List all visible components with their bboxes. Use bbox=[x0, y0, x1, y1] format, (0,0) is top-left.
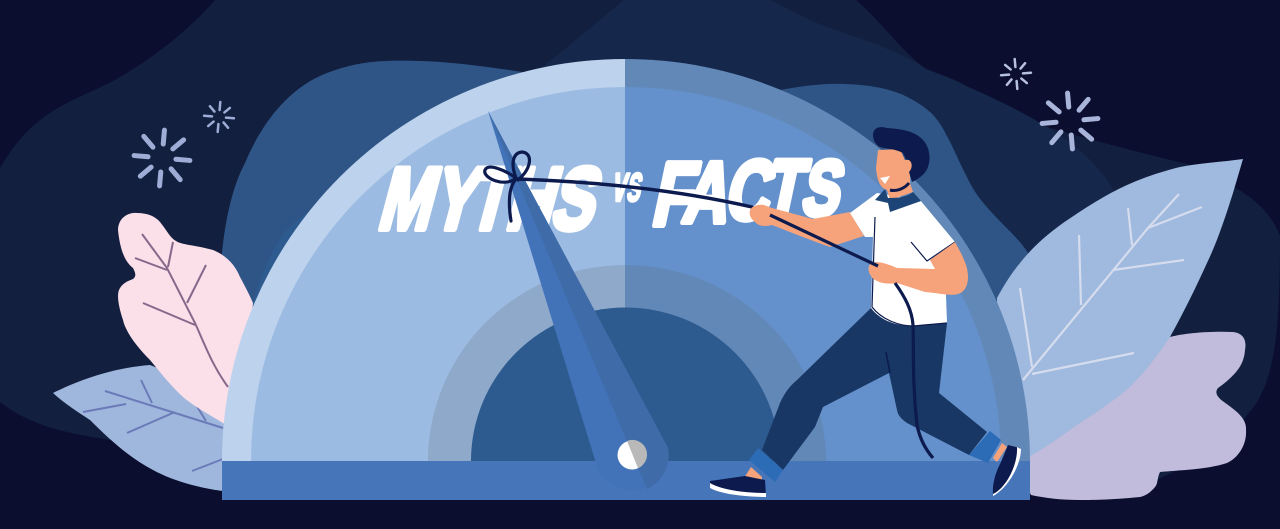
smile bbox=[880, 176, 890, 184]
pants bbox=[762, 308, 987, 470]
gauge base bbox=[222, 461, 1030, 500]
leaf: right blue bbox=[997, 159, 1243, 470]
left ankle bbox=[744, 467, 762, 481]
shirt bbox=[850, 193, 955, 326]
shirt lines bbox=[872, 217, 955, 326]
right shoe sole bbox=[993, 447, 1021, 496]
collar bbox=[875, 189, 921, 212]
left cuff bbox=[749, 448, 783, 482]
left shoe bbox=[710, 476, 766, 497]
title: myths: Y bbox=[424, 149, 493, 248]
rope in hands bbox=[770, 215, 933, 458]
title: myths: H bbox=[499, 149, 571, 248]
right ankle bbox=[993, 443, 1007, 462]
title: facts: C bbox=[719, 143, 783, 237]
rope with bow bbox=[485, 152, 752, 221]
gauge dial bbox=[222, 59, 1030, 461]
near arm and hand bbox=[868, 242, 968, 295]
leaf: left blue bbox=[53, 365, 240, 493]
gauge needle bbox=[488, 111, 669, 490]
title: myths: M bbox=[371, 149, 450, 248]
left shoe sole bbox=[710, 483, 766, 497]
title: vs: vs bbox=[609, 154, 648, 212]
sparkle: right large bbox=[1040, 91, 1100, 151]
sparkle: left large bbox=[132, 128, 192, 188]
leaf: left pink bbox=[118, 213, 253, 440]
trouser seam bbox=[886, 352, 890, 373]
title: myths: S bbox=[544, 149, 612, 248]
head and neck bbox=[876, 149, 913, 200]
title: facts: A bbox=[677, 145, 742, 241]
title: facts: F bbox=[646, 144, 707, 244]
neck shadow bbox=[890, 183, 909, 191]
right shoe bbox=[993, 445, 1020, 495]
title: facts: T bbox=[759, 143, 815, 235]
title: facts: S bbox=[796, 145, 852, 232]
leaf: right lilac bbox=[1000, 332, 1246, 500]
far arm and hand bbox=[750, 205, 864, 247]
needle hub bbox=[618, 440, 647, 470]
hair bbox=[873, 127, 930, 182]
sparkle: right small bbox=[1000, 58, 1032, 90]
person pulling rope bbox=[710, 127, 1021, 497]
back blob behind gauge bbox=[220, 61, 1044, 460]
right cuff bbox=[969, 431, 1001, 463]
sparkle: left small bbox=[203, 101, 235, 133]
title: myths: T bbox=[461, 149, 526, 248]
